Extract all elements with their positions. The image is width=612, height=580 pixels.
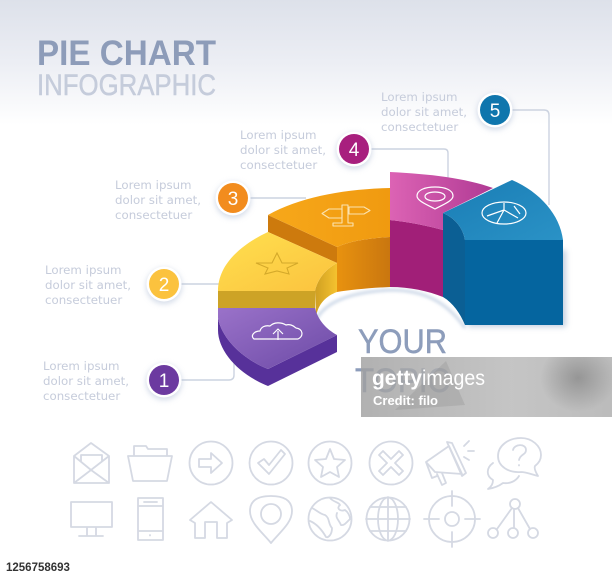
icon: envelope — [74, 443, 109, 483]
callout text 4: Lorem ipsum — [240, 128, 317, 142]
segment 2: yellow — [218, 232, 337, 317]
segment 5: blue — [443, 180, 563, 325]
callout text 2: Lorem ipsum — [45, 263, 122, 277]
chart shadow — [316, 250, 566, 328]
callout text 3: dolor sit amet, — [115, 193, 201, 207]
title: PIE CHART — [37, 34, 216, 73]
connector lines — [180, 110, 549, 380]
background gradient — [0, 0, 612, 125]
stock image id: 1256758693 — [6, 562, 70, 574]
your topic text: YOUR — [358, 323, 447, 361]
title: INFOGRAPHIC — [37, 69, 216, 102]
callout text 5: dolor sit amet, — [381, 105, 467, 119]
callout text 5: consectetuer — [381, 120, 458, 134]
icon: megaphone — [426, 441, 474, 485]
number badge 3: 3 — [228, 189, 238, 210]
icon: network — [488, 499, 538, 538]
callout text 4: dolor sit amet, — [240, 143, 326, 157]
icon: monitor — [71, 502, 112, 536]
title — [37, 34, 216, 102]
segment 3: orange — [268, 188, 390, 292]
icon: earth — [308, 498, 352, 540]
number badge 4 — [336, 132, 372, 169]
number badge 2: 2 — [159, 275, 169, 296]
number badge 4: 4 — [349, 140, 360, 161]
callout text 1: consectetuer — [43, 389, 120, 403]
icon: arrow circle — [190, 442, 232, 484]
stock watermark banner — [361, 357, 612, 417]
icon: speech bubbles — [488, 438, 541, 489]
stock watermark banner: Credit: filo — [373, 393, 438, 408]
segment 1: purple — [218, 308, 337, 386]
icon: cross circle — [370, 442, 412, 484]
callout text 1: Lorem ipsum — [43, 359, 120, 373]
icon: globe — [366, 497, 410, 541]
number badge 1 — [146, 362, 182, 400]
icon: folder — [128, 446, 172, 481]
callout text 5: Lorem ipsum — [381, 90, 458, 104]
icon: location pin — [250, 496, 292, 543]
callout text 2: consectetuer — [45, 293, 122, 307]
callout text 4: consectetuer — [240, 158, 317, 172]
segment 4: magenta — [390, 172, 493, 297]
callout text 2: dolor sit amet, — [45, 278, 131, 292]
callout text 3: consectetuer — [115, 208, 192, 222]
3D pie chart — [218, 172, 563, 386]
number badge 1: 1 — [159, 371, 169, 392]
icon: house — [190, 502, 232, 538]
number badge 5 — [477, 92, 513, 130]
icon: star circle — [308, 442, 352, 484]
callout text 3: Lorem ipsum — [115, 178, 192, 192]
your topic text: TOPIC — [355, 362, 450, 400]
icon: check circle — [250, 442, 292, 484]
number badge 2 — [146, 266, 182, 304]
stock watermark banner: gettyimages — [372, 367, 485, 390]
number badge 3 — [215, 180, 251, 218]
icon: smartphone — [138, 498, 163, 540]
callout text 1: dolor sit amet, — [43, 374, 129, 388]
number badge 5: 5 — [490, 101, 500, 122]
icon: target — [424, 491, 480, 547]
